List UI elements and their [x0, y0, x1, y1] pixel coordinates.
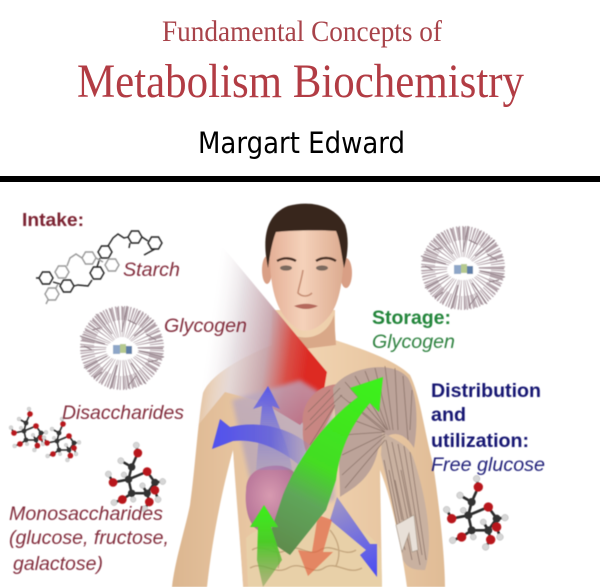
panel: distribution: [431, 381, 545, 550]
body skin: [172, 310, 445, 587]
tendon: [396, 515, 418, 552]
arrow: blue upward: [253, 386, 292, 470]
head: [262, 204, 352, 331]
label: monosaccharides: Monosaccharides: [9, 504, 164, 525]
molecule: starch: [36, 231, 162, 304]
ears: [262, 256, 272, 284]
mouth: [294, 304, 318, 309]
title line 2: Metabolism Biochemistry: [77, 55, 524, 108]
molecule: glycogen left: [80, 306, 164, 389]
illustration: human figure: [170, 204, 445, 587]
label: disaccharides: Disaccharides: [62, 403, 185, 424]
nose: [298, 270, 312, 296]
heading: storage: Storage:: [372, 308, 451, 329]
muscle fibres: [305, 366, 426, 565]
liver: [246, 466, 299, 532]
translucent abdomen overlay: [232, 380, 335, 510]
heading: distribution: utilization:: [431, 431, 529, 452]
label: monosaccharides: galactose): [13, 554, 103, 575]
label: starch: Starch: [123, 260, 180, 281]
shoulder muscle: [333, 367, 416, 497]
header rule: [0, 176, 600, 182]
heading: intake: Intake:: [22, 210, 84, 230]
label: monosaccharides: [9, 504, 169, 575]
molecule: free glucose: [443, 475, 508, 550]
arrow: large green: [268, 377, 383, 555]
red and grey wedge: [170, 240, 327, 435]
upper arm muscle: [381, 432, 429, 570]
neck shade: [278, 315, 336, 352]
author: Margart Edward: [198, 126, 405, 160]
arrows: [212, 377, 383, 587]
intestines: [246, 520, 382, 587]
molecule: monosaccharide: [105, 442, 166, 512]
muscles: [303, 366, 429, 570]
panel: intake: [9, 210, 247, 575]
heading: distribution: [431, 381, 541, 452]
title: [77, 15, 524, 108]
molecule: glycogen right: [421, 226, 505, 309]
panel: storage: [372, 226, 505, 353]
brows and eyes: [277, 258, 336, 261]
label: glycogen: Glycogen: [164, 316, 247, 337]
label: monosaccharides: (glucose, fructose,: [9, 528, 169, 549]
arrow: red downward: [298, 515, 333, 576]
label: free glucose: Free glucose: [431, 455, 545, 476]
label: storage glycogen: Glycogen: [372, 332, 455, 353]
hair: [265, 204, 348, 268]
chest muscle: [303, 384, 345, 460]
molecule: disaccharide: [9, 407, 81, 462]
heading: distribution: and: [431, 405, 466, 426]
face: [270, 220, 344, 331]
arrow: small green: [250, 505, 282, 587]
title line 1: Fundamental Concepts of: [162, 15, 442, 48]
heading: distribution: Distribution: [431, 381, 541, 402]
arrow: blue diagonal to abdomen: [330, 497, 377, 577]
gap between arm and torso: [228, 452, 243, 587]
arrow: blue leftward: [212, 419, 310, 470]
